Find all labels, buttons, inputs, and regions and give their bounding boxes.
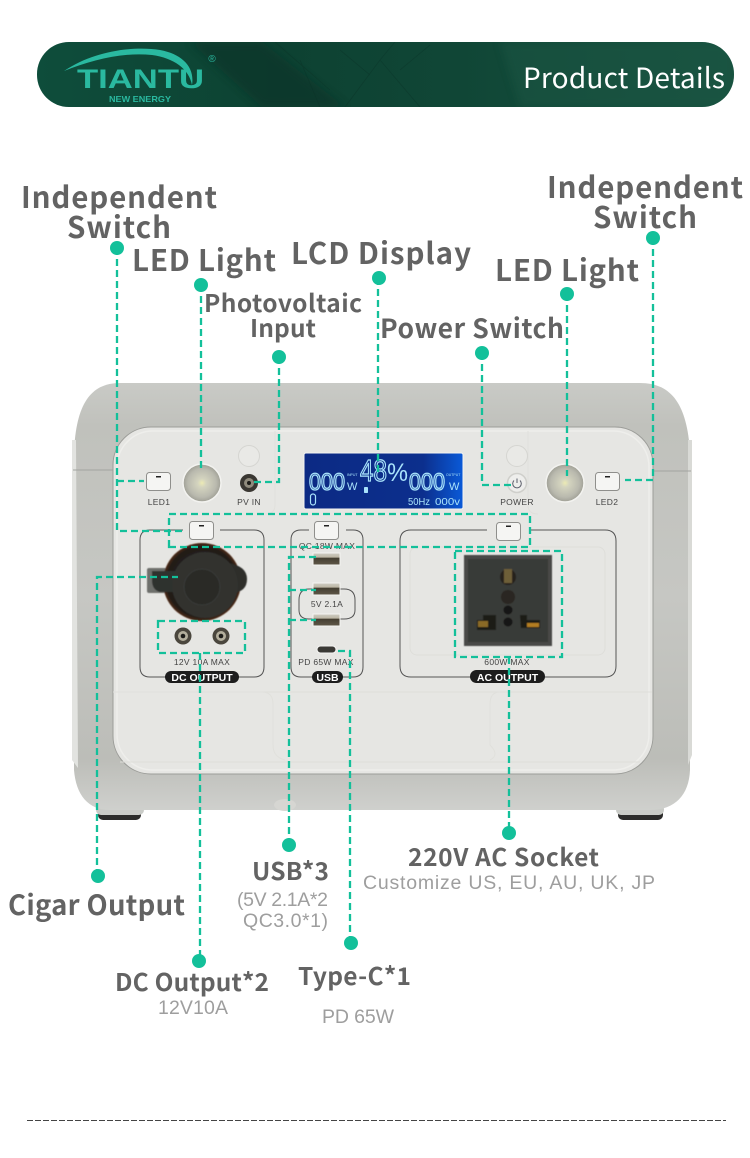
callout: left independent switch <box>21 175 217 531</box>
callout: photovoltaic input: Input <box>250 310 316 345</box>
callout: left LED light: LED Light <box>132 238 276 280</box>
LCD display: W <box>449 481 460 493</box>
callout: USB: USB*3 <box>252 853 329 888</box>
LED1 switch: LED1 <box>148 497 170 507</box>
callout: Type-C <box>298 651 411 1028</box>
callout: AC socket: Customize US, EU, AU, UK, JP <box>363 872 655 894</box>
USB group <box>291 522 363 684</box>
callout: power switch <box>380 307 564 485</box>
LCD display: 000v <box>435 497 460 508</box>
callout: DC output <box>115 621 269 1019</box>
AC output group <box>400 522 616 684</box>
front panel <box>113 427 653 774</box>
fan icon <box>310 494 316 505</box>
header banner <box>37 42 734 107</box>
blank round cap right <box>506 446 528 466</box>
DC output tag: DC OUTPUT <box>171 672 233 684</box>
PV input port <box>237 474 261 507</box>
5V bracket: 5V 2.1A <box>311 599 343 609</box>
callout: USB: QC3.0*1) <box>243 910 328 932</box>
LCD display: % <box>387 459 408 487</box>
callout: LCD display <box>291 231 471 476</box>
feet <box>96 804 664 820</box>
LCD display <box>304 453 463 509</box>
callout: AC socket: 220V AC Socket <box>408 839 599 874</box>
callout: cigar output <box>8 577 185 923</box>
5V bracket <box>299 589 355 619</box>
LCD display: OUTPUT <box>446 473 461 477</box>
callout: left independent switch: Independent <box>21 175 217 217</box>
callout frame: switch row <box>169 514 530 547</box>
DC jacks <box>174 628 230 644</box>
Type-C port <box>317 646 336 653</box>
callout: photovoltaic input <box>204 285 362 482</box>
AC output tag: AC OUTPUT <box>477 672 539 684</box>
power station device <box>72 383 692 820</box>
callout: DC output: 12V10A <box>158 997 228 1019</box>
callout: right LED light: LED Light <box>495 248 639 290</box>
callout: right LED light <box>495 248 639 476</box>
power button: POWER <box>500 497 534 507</box>
cigar socket <box>147 543 247 621</box>
QC rating: QC 18W MAX <box>299 541 355 551</box>
callout: cigar output: Cigar Output <box>8 883 185 923</box>
output watts: 000 <box>409 469 445 496</box>
logo <box>64 49 216 104</box>
callout: Type-C: Type-C*1 <box>298 958 411 993</box>
callout: AC socket <box>363 551 655 894</box>
callout: LCD display: LCD Display <box>291 231 471 273</box>
outer grey shell <box>72 383 692 811</box>
PD rating: PD 65W MAX <box>298 657 354 667</box>
callout: USB: (5V 2.1A*2 <box>237 889 328 911</box>
battery percent: 48 <box>360 453 387 488</box>
DC switch <box>190 522 214 540</box>
power button <box>500 474 534 507</box>
callout: right independent switch: Independent <box>547 165 743 207</box>
USB tag <box>312 671 343 684</box>
left LED light <box>183 464 221 502</box>
callout: Type-C: PD 65W <box>322 1006 395 1028</box>
logo swoosh <box>64 49 192 85</box>
battery icon <box>364 487 368 493</box>
AC switch <box>496 522 520 540</box>
callout: power switch: Power Switch <box>380 307 564 346</box>
DC rating: 12V 10A MAX <box>174 657 230 667</box>
logo tagline: NEW ENERGY <box>109 94 171 104</box>
DC output group <box>140 522 264 684</box>
PV input port: PV IN <box>237 497 261 507</box>
LED1 switch <box>146 472 170 507</box>
AC socket <box>464 555 552 646</box>
callout: left independent switch: Switch <box>67 205 171 247</box>
LED2 switch <box>596 472 620 507</box>
callout: USB <box>237 557 329 932</box>
callout: left LED light <box>132 238 276 472</box>
callout: photovoltaic input: Photovoltaic <box>204 285 362 320</box>
USB switch <box>314 522 338 540</box>
logo wordmark: TIANTU <box>77 64 204 94</box>
input watts: 000 <box>309 469 345 496</box>
banner title: Product Details <box>523 57 725 97</box>
blank round cap left <box>238 446 260 466</box>
callout: right independent switch <box>547 165 743 480</box>
callout: right independent switch: Switch <box>593 195 697 237</box>
frequency and voltage: 50Hz <box>408 497 430 508</box>
right LED light <box>546 464 584 502</box>
registered mark: ® <box>208 54 216 65</box>
AC rating: 600W MAX <box>484 657 530 667</box>
USB tag: USB <box>316 672 339 684</box>
LED2 switch: LED2 <box>596 497 618 507</box>
callout: DC output: DC Output*2 <box>115 964 269 999</box>
LCD display: INPUT <box>347 473 358 477</box>
LCD display: W <box>347 481 358 493</box>
USB ports <box>313 553 340 626</box>
